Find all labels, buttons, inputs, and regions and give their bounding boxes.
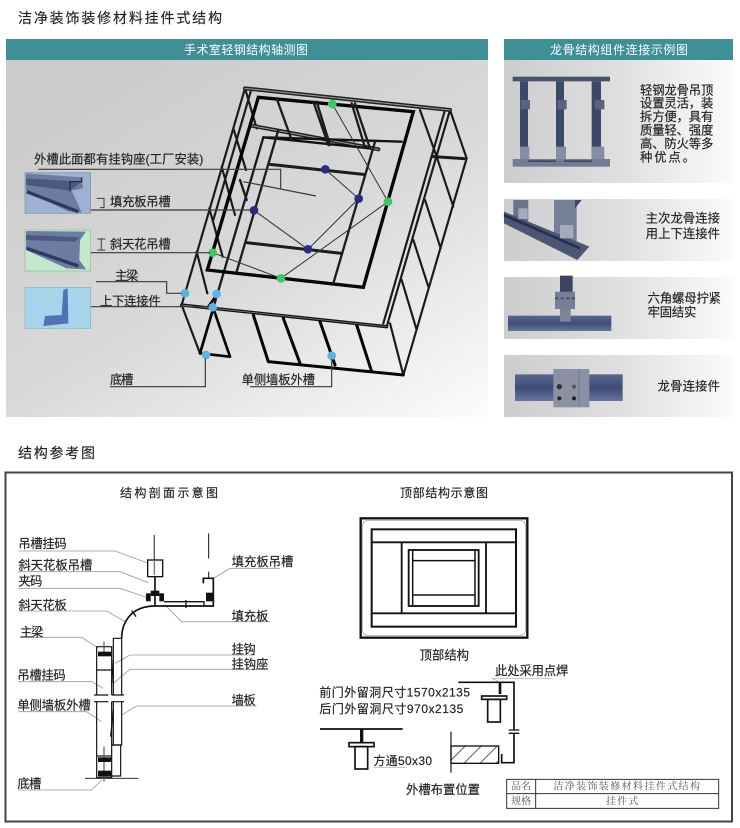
section labels: 挂钩 — [232, 643, 256, 657]
text: hex nut connection: 六角螺母拧紧 — [648, 292, 721, 306]
side header — [504, 39, 733, 60]
top view drawing and details — [319, 518, 719, 808]
text: keel connector: 龙骨连接件 — [658, 379, 720, 394]
spec table: 品名 — [511, 780, 531, 792]
marker dots — [181, 100, 392, 360]
section labels: 斜天花板 — [18, 598, 67, 613]
beam fasteners — [98, 652, 111, 777]
spec table: 规格 — [511, 794, 531, 807]
text: keel advantages: 种优点。 — [640, 151, 695, 165]
top beams — [245, 88, 450, 110]
section labels: 吊槽挂码 — [18, 537, 67, 551]
spec table: 挂件式 — [606, 794, 638, 807]
leader lines — [18, 551, 280, 790]
caption: top structure: 顶部结构 — [420, 647, 469, 662]
side header: 龙骨结构组件连接示例图 — [550, 42, 688, 57]
section labels: 主梁 — [20, 625, 43, 640]
panel: keel assembly examples — [504, 39, 733, 417]
panel header — [6, 39, 488, 60]
thumbnail: inclined ceiling channel — [25, 230, 91, 271]
photo: hex nut connection — [508, 276, 611, 331]
thumbnail: filler hanging channel — [25, 173, 91, 213]
connecting thin lines — [213, 104, 388, 278]
text: keel advantages: 轻钢龙骨吊顶 — [640, 83, 713, 97]
inner structural members — [237, 98, 375, 283]
section labels: 夹码 — [18, 575, 42, 589]
label: spot welding: 此处采用点焊 — [495, 663, 568, 678]
label: door openings: 后门外留洞尺寸970x2135 — [319, 701, 464, 716]
clips — [146, 591, 213, 601]
panel: axonometric drawing — [6, 39, 488, 417]
text: keel advantages: 设置灵活，装 — [640, 97, 713, 111]
label: door openings: 前门外留洞尺寸1570x2135 — [319, 684, 470, 699]
label: square tube: 方通50x30 — [373, 753, 432, 768]
spec table — [507, 779, 719, 808]
photo: main and secondary keel — [504, 200, 589, 260]
section title: 结构参考图 — [18, 445, 95, 461]
text: keel advantages — [640, 83, 713, 165]
section labels: 填充板吊槽 — [232, 554, 293, 569]
top structure plan — [361, 518, 527, 638]
label: connector: 上下连接件 — [100, 293, 161, 308]
leader lines — [38, 169, 332, 387]
panel header: 手术室轻钢结构轴测图 — [184, 42, 308, 57]
label: outer channel: 外槽此面都有挂钩座(工厂安装) — [34, 151, 203, 166]
panel background — [6, 60, 488, 417]
section labels: 挂钩座 — [232, 656, 268, 671]
callouts — [25, 151, 332, 387]
section labels: 吊槽挂码 — [17, 668, 66, 682]
wall section — [85, 638, 138, 782]
section labels — [17, 537, 293, 791]
label: door openings — [319, 684, 470, 716]
text: keel advantages: 质量轻、强度 — [640, 123, 713, 138]
text: keel advantages: 拆方便，具有 — [640, 109, 713, 124]
reference frame — [6, 472, 732, 822]
section labels: 填充板 — [232, 608, 268, 623]
inner black rectangle — [207, 97, 413, 287]
ceiling section — [122, 533, 213, 638]
text: main and secondary keel — [646, 211, 720, 241]
label: wall outer channel: 单侧墙板外槽 — [242, 373, 315, 387]
example 2 background — [504, 199, 733, 261]
thumbnail: connector — [25, 287, 91, 328]
section labels: 单侧墙板外槽 — [17, 699, 91, 713]
heading: section view: 结构剖面示意图 — [120, 485, 218, 500]
door and front beam — [200, 295, 403, 375]
outer frame members — [182, 88, 467, 375]
section labels: 底槽 — [17, 776, 41, 791]
section drawing — [17, 533, 293, 791]
section labels: 斜天花板吊槽 — [18, 557, 92, 572]
text: hex nut connection: 牢固结实 — [648, 304, 696, 319]
label: inclined channel: 斜天花吊槽 — [110, 237, 171, 252]
spec table: 洁净装饰装修材料挂件式结构 — [553, 779, 700, 792]
heading: top view: 顶部结构示意图 — [400, 485, 488, 500]
photo: keel frame — [513, 77, 610, 167]
text: main and secondary keel: 主次龙骨连接 — [646, 211, 720, 226]
example 4 background — [504, 355, 733, 417]
section labels: 墙板 — [232, 693, 256, 707]
text: main and secondary keel: 用上下连接件 — [646, 226, 720, 241]
text: keel advantages: 高、防火等多 — [640, 136, 713, 151]
photo: keel connector — [515, 369, 623, 407]
axonometric frame — [181, 88, 467, 375]
example 3 background — [504, 277, 733, 339]
channel placement detail — [451, 678, 553, 773]
square tube detail — [320, 729, 407, 769]
text: hex nut connection — [648, 292, 721, 319]
label: bottom channel: 底槽 — [110, 372, 133, 387]
label: filler channel: 填充板吊槽 — [110, 194, 171, 209]
label: main beam: 主梁 — [115, 268, 138, 283]
caption: channel position: 外槽布置位置 — [406, 782, 480, 797]
panel: structure reference — [6, 472, 732, 822]
example 1 background — [504, 60, 733, 183]
page title: 洁净装饰装修材料挂件式结构 — [18, 10, 222, 26]
